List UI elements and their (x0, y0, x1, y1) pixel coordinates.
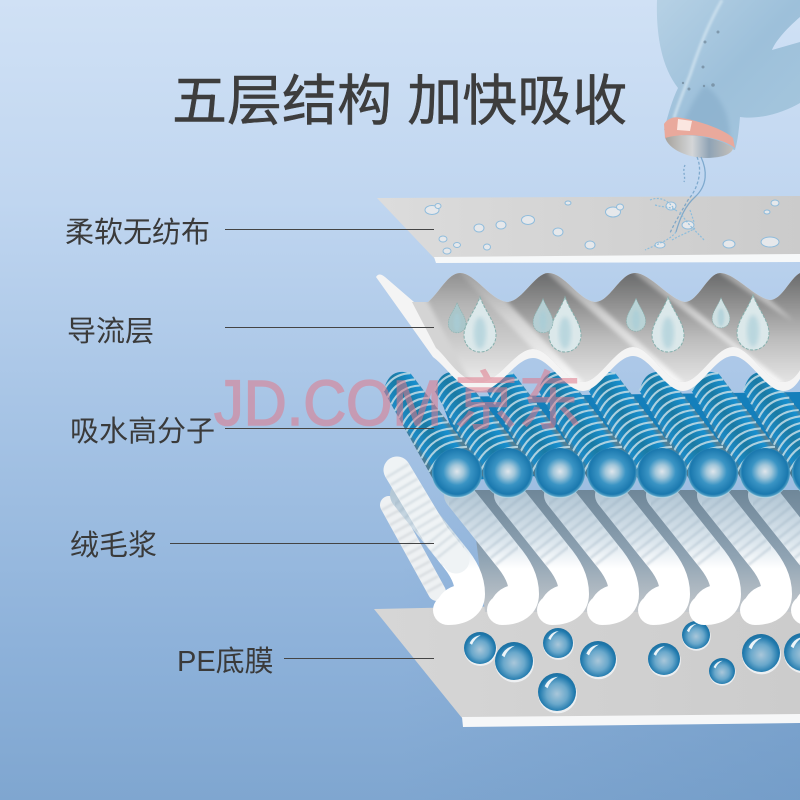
watermark (214, 366, 582, 439)
sheet surface (374, 600, 800, 718)
neck shade (680, 85, 730, 140)
water beads (464, 621, 800, 713)
sheet rim (376, 273, 800, 391)
layer 5: PE film sheet with water beads (374, 600, 800, 727)
sheet surface (377, 196, 800, 258)
water droplets (425, 200, 779, 254)
bottle ring (664, 117, 735, 148)
bottle pouring water (645, 0, 800, 250)
bottle body (657, 0, 800, 150)
watermark: 京东 (454, 366, 582, 438)
first column exposed top (397, 470, 456, 560)
bottle mouth (665, 135, 733, 158)
label: fluff pulp: 绒毛浆 (70, 529, 157, 562)
layer 2: wavy diversion sheet (376, 273, 800, 391)
label: diversion layer: 导流层 (67, 315, 154, 348)
bottle highlight (674, 0, 722, 118)
tube backing (440, 392, 800, 480)
sheet front edge (462, 714, 800, 727)
label: PE film: PE底膜 (177, 645, 274, 678)
sheet surface (412, 273, 800, 382)
water splash on sheet (645, 198, 704, 250)
label: non-woven: 柔软无纺布 (65, 216, 210, 249)
watermark: JD.COM (214, 367, 442, 439)
bottle speckles (682, 30, 720, 90)
layer 4: fluff pulp columns (389, 470, 800, 623)
leader lines (170, 230, 434, 658)
tubes (384, 372, 800, 498)
ridge shading (426, 273, 800, 382)
columns (405, 495, 800, 623)
teardrops (448, 295, 769, 352)
sheet front edge (434, 254, 800, 263)
left edge fluff row (389, 505, 437, 592)
water stream (670, 157, 705, 233)
label: polymer: 吸水高分子 (70, 415, 215, 448)
layer 1: soft non-woven top sheet (377, 196, 800, 263)
column shadow base (470, 490, 800, 612)
layer 3: absorbent polymer tubes (384, 372, 800, 498)
ring highlight (677, 119, 692, 131)
title: 五层结构 加快吸收 (172, 70, 627, 132)
